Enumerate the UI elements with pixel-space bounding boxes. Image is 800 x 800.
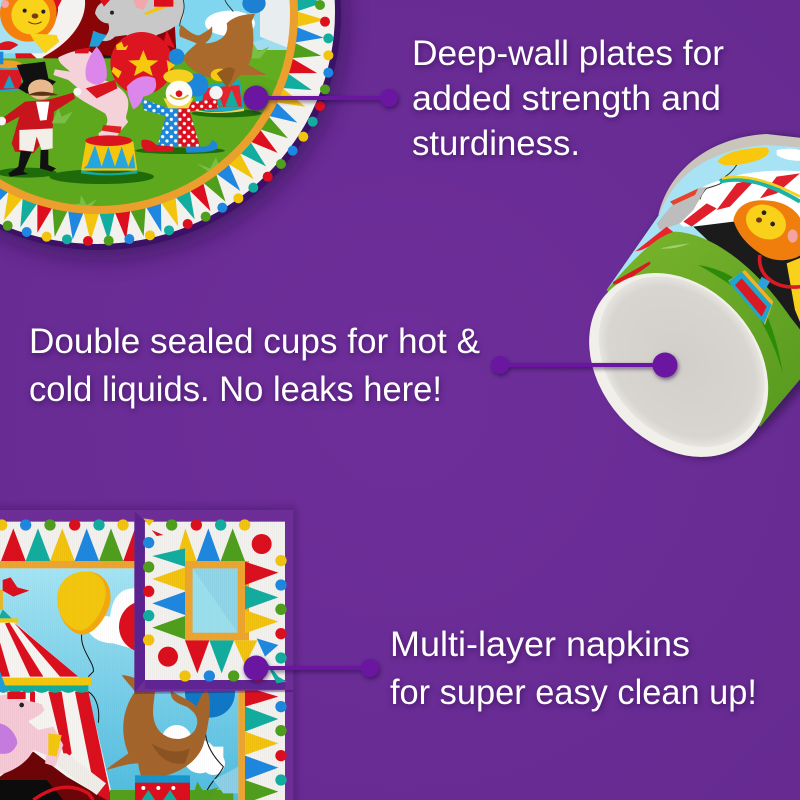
cup circus art (607, 147, 800, 427)
grass (52, 43, 269, 208)
text: napkins: Multi-layer napkins (390, 625, 690, 664)
callout: cup connector (491, 352, 678, 378)
callout: napkin connector (244, 656, 379, 680)
text: napkins: for super easy clean up! (390, 673, 757, 712)
folded napkin flap (134, 511, 293, 694)
napkin sky (0, 568, 238, 800)
plate orange ring (0, 0, 294, 210)
seal (179, 14, 267, 87)
plate (0, 0, 348, 260)
callout: plate connector (244, 86, 398, 110)
cup rim (658, 134, 800, 217)
clouds (89, 588, 134, 648)
left drum (0, 62, 23, 92)
pink unicorn (0, 667, 63, 775)
plate bunting flags (0, 0, 325, 241)
cup (589, 132, 800, 462)
clown (142, 98, 168, 117)
text: cups: Double sealed cups for hot & (29, 322, 480, 361)
right drum (194, 80, 244, 112)
unicorn (53, 50, 128, 139)
balloon and strings (180, 0, 233, 27)
napkin base and border (0, 510, 293, 800)
center drum (81, 142, 137, 171)
flap dots (166, 519, 177, 531)
cup base inner disc (599, 276, 764, 447)
yellow balloon (57, 571, 111, 723)
top bunting row (0, 519, 147, 561)
red balloon (119, 602, 134, 650)
red ball (110, 32, 173, 95)
blue balloon behind seal (185, 690, 235, 718)
tent (43, 0, 177, 63)
flap bunting (179, 528, 197, 561)
napkin (0, 507, 297, 800)
text: cups: cold liquids. No leaks here! (29, 370, 442, 409)
cup body (607, 145, 800, 427)
circus tent (0, 577, 113, 800)
lion (0, 0, 57, 42)
plate circus scene (0, 0, 298, 212)
text: plates: added strength and (412, 79, 721, 118)
right bunting column (245, 687, 287, 800)
text: cups (29, 322, 480, 409)
shadow (192, 109, 262, 117)
flap inner panel (185, 561, 249, 640)
text: napkins (390, 625, 757, 712)
text: plates: Deep-wall plates for (412, 34, 724, 73)
text: plates: sturdiness. (412, 124, 580, 163)
cup base outer rim (589, 273, 768, 457)
seal on napkin (106, 675, 210, 776)
plate rim dots (3, 0, 333, 246)
elephant (95, 0, 184, 45)
seal drum (135, 775, 190, 800)
text: plates (412, 34, 724, 163)
ringmaster (17, 62, 56, 94)
